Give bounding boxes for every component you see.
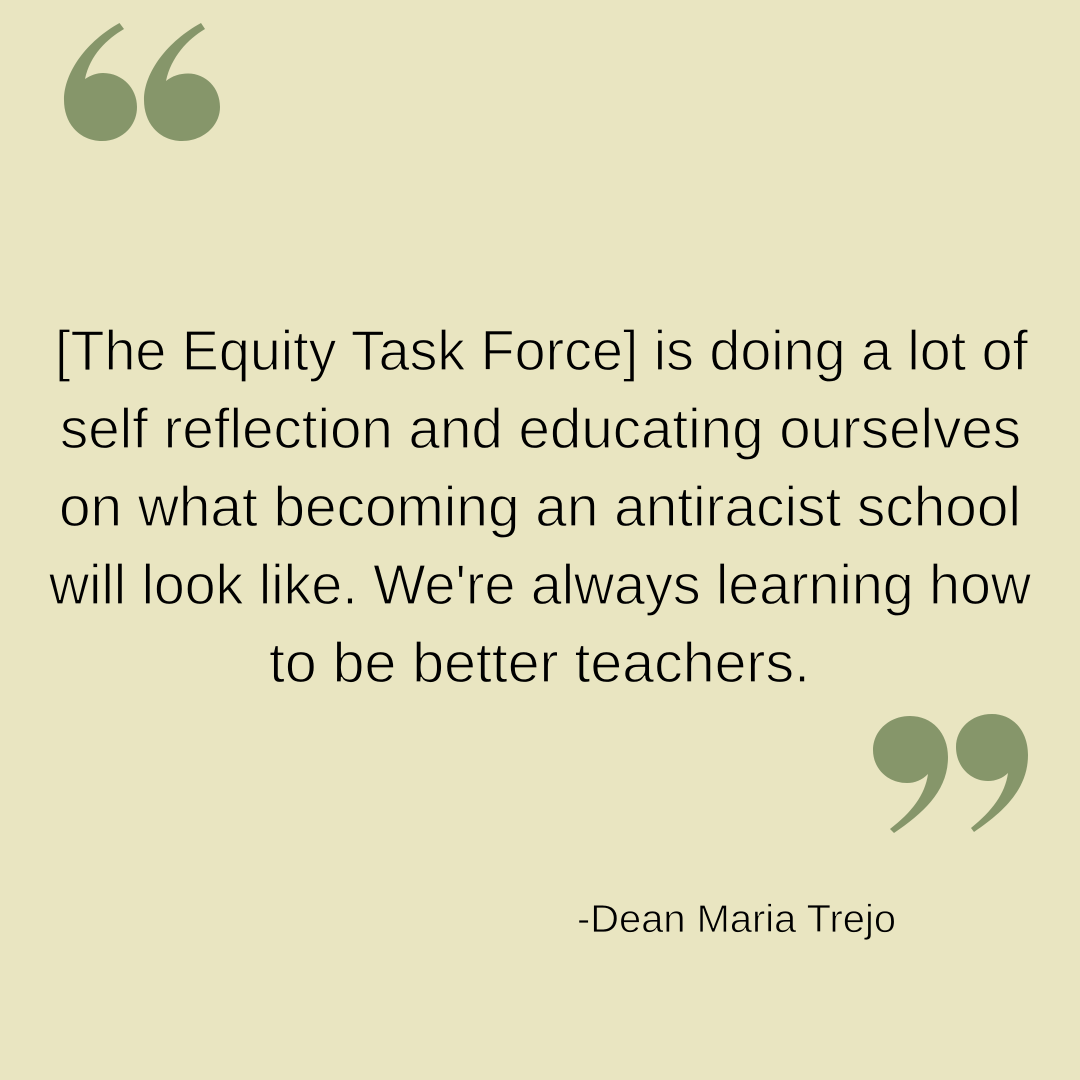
quote text: on what becoming an antiracist school (59, 475, 1021, 538)
quote text (48, 319, 1031, 694)
quote text: will look like. We're always learning how (48, 553, 1031, 616)
quote text: to be better teachers. (269, 631, 810, 694)
attribution: -Dean Maria Trejo (577, 898, 896, 941)
icon: opening quotation mark (64, 23, 220, 141)
icon: closing quotation mark (873, 714, 1028, 833)
quote text: self reflection and educating ourselves (60, 397, 1021, 460)
quote text: [The Equity Task Force] is doing a lot of (55, 319, 1028, 382)
